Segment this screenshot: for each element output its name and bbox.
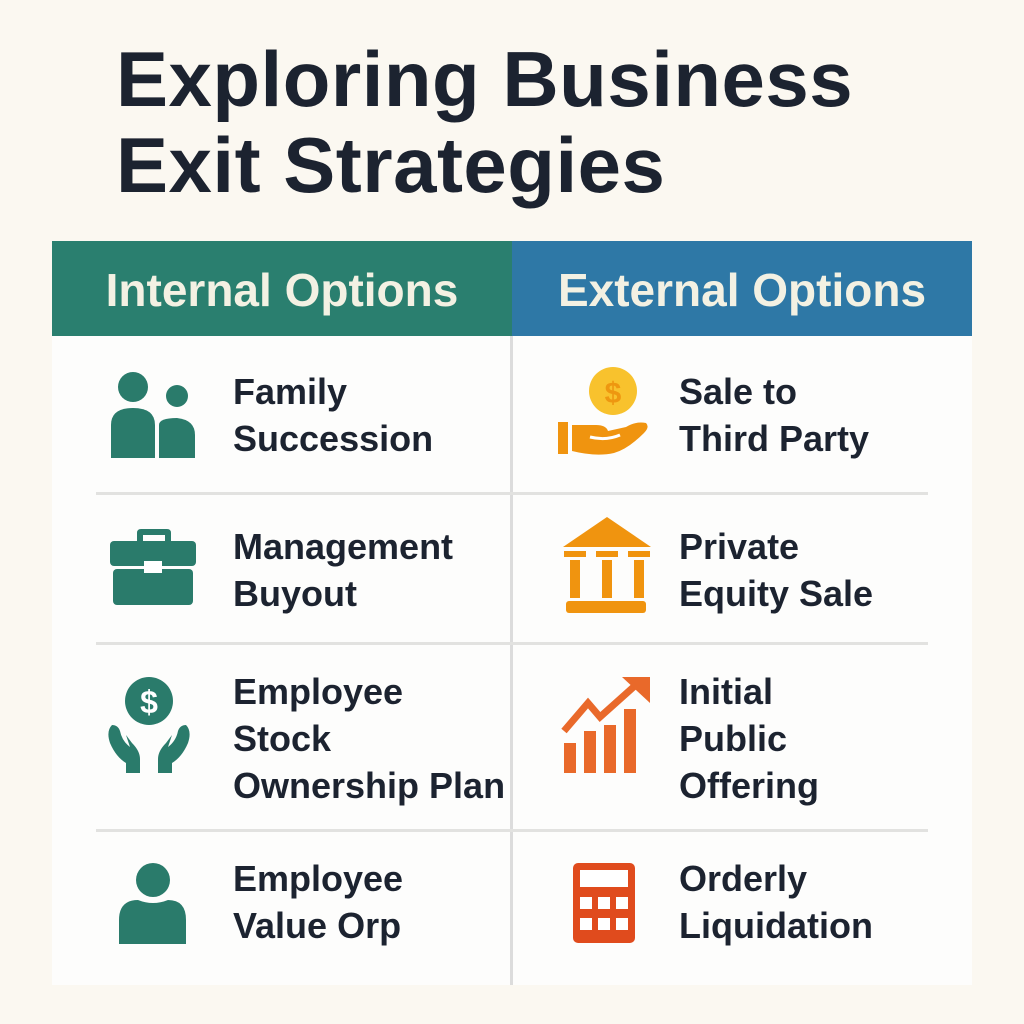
text: family succession: Succession bbox=[233, 418, 433, 459]
header: internal: Internal Options bbox=[106, 264, 458, 316]
text: management buyout: Management bbox=[233, 526, 453, 567]
text: ESOP bbox=[233, 671, 505, 806]
text: private equity sale: Equity Sale bbox=[679, 573, 873, 614]
icon: briefcase bbox=[110, 529, 196, 605]
title: Exploring Business bbox=[116, 35, 853, 123]
text: IPO bbox=[679, 671, 819, 806]
text: employee value orp: Value Orp bbox=[233, 905, 401, 946]
text: IPO: Initial bbox=[679, 671, 773, 712]
text: private equity sale: Private bbox=[679, 526, 799, 567]
icon: bank bbox=[563, 517, 651, 613]
text: management buyout: Buyout bbox=[233, 573, 357, 614]
text: employee value orp: Employee bbox=[233, 858, 403, 899]
header: internal bbox=[52, 241, 512, 336]
text: orderly liquidation: Orderly bbox=[679, 858, 807, 899]
text: private equity sale bbox=[679, 526, 873, 614]
text: ESOP: Stock bbox=[233, 718, 331, 759]
text: sale to third party bbox=[679, 371, 869, 459]
text: sale to third party: Sale to bbox=[679, 371, 797, 412]
text: orderly liquidation: Liquidation bbox=[679, 905, 873, 946]
icon: hands with coin bbox=[108, 677, 190, 773]
text: ESOP: Ownership Plan bbox=[233, 765, 505, 806]
title: Exit Strategies bbox=[116, 121, 665, 209]
icon: hands with coin: $ bbox=[140, 684, 158, 720]
text: IPO: Public bbox=[679, 718, 787, 759]
text: sale to third party: Third Party bbox=[679, 418, 869, 459]
icon: person bbox=[119, 863, 186, 944]
icon: calculator bbox=[573, 863, 635, 943]
text: employee value orp bbox=[233, 858, 403, 946]
header: external bbox=[512, 241, 972, 336]
icon: family bbox=[111, 372, 195, 458]
icon: hand with coin: $ bbox=[605, 377, 622, 410]
icon: growth chart bbox=[561, 677, 650, 773]
header: external: External Options bbox=[558, 264, 926, 316]
text: family succession: Family bbox=[233, 371, 347, 412]
icon: hand with coin bbox=[558, 367, 648, 455]
table panel bbox=[52, 241, 972, 985]
text: management buyout bbox=[233, 526, 453, 614]
text: ESOP: Employee bbox=[233, 671, 403, 712]
text: orderly liquidation bbox=[679, 858, 873, 946]
text: IPO: Offering bbox=[679, 765, 819, 806]
title bbox=[116, 35, 853, 209]
text: family succession bbox=[233, 371, 433, 459]
